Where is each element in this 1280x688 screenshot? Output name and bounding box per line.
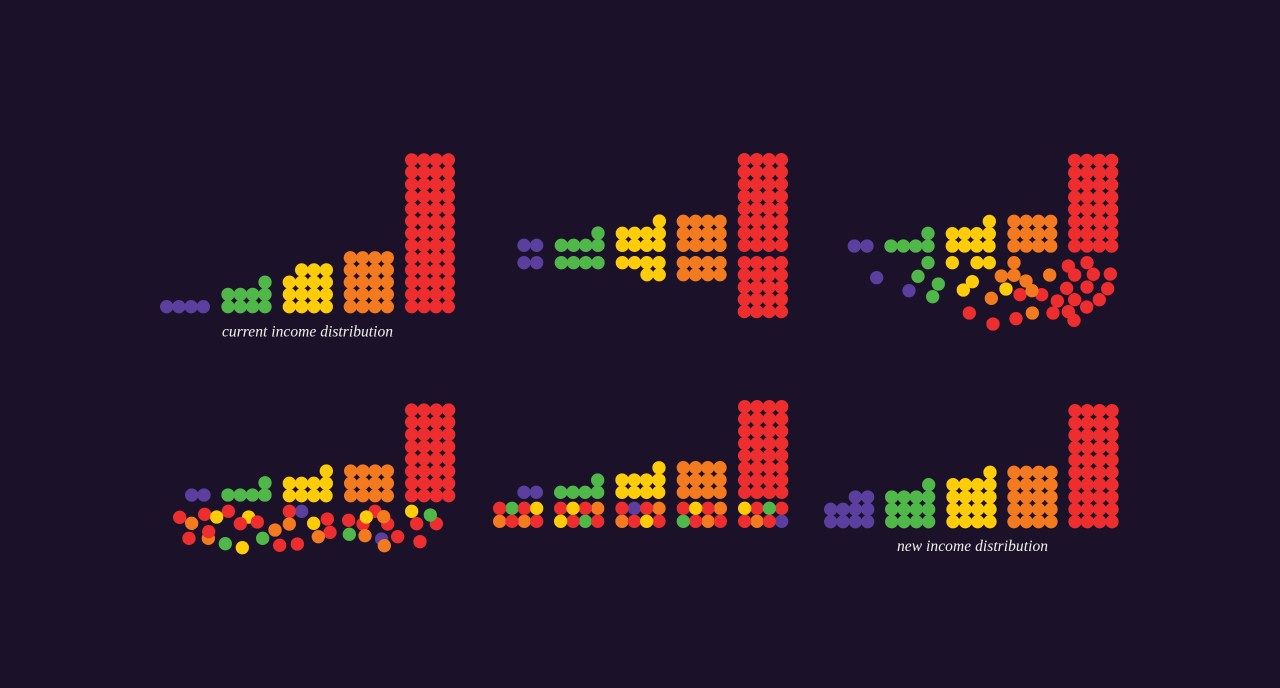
caption: current income distribution: current income distribution	[222, 324, 393, 340]
purple dots split	[517, 239, 543, 269]
scattered orange dots	[185, 510, 391, 552]
purple dots	[848, 239, 916, 297]
panel: new income distribution chart	[831, 410, 1112, 522]
caption: new income distribution: new income distribution	[897, 538, 1048, 555]
yellow bar top	[622, 467, 659, 492]
purple dots	[185, 488, 211, 502]
yellow bar remainder	[289, 471, 326, 496]
orange bar remainder	[351, 471, 388, 496]
green income bar	[892, 484, 929, 522]
under-layer mixed row dots	[493, 502, 788, 528]
green bar remainder	[228, 482, 265, 495]
panel: top bars splitting	[517, 159, 781, 312]
panel: dots redistributed and scattered	[173, 410, 449, 554]
purple bar top	[517, 486, 543, 499]
green dots split	[561, 233, 598, 263]
red bar remainder	[412, 410, 449, 496]
orange falling dots	[985, 256, 1056, 320]
panel: current income distribution chart	[167, 160, 448, 307]
under-layer scattered dots	[202, 505, 388, 546]
green income bar	[228, 282, 265, 307]
orange bar remainder	[1014, 221, 1051, 246]
yellow bar remainder	[952, 221, 989, 246]
scattered green dots	[219, 508, 437, 550]
yellow dots split	[622, 221, 659, 275]
orange income bar	[1014, 472, 1051, 522]
yellow income bar	[289, 270, 326, 307]
red bar top	[745, 406, 782, 492]
scattered yellow dots	[210, 505, 418, 554]
scattered red dots	[173, 505, 443, 552]
orange bar top	[683, 468, 720, 492]
orange dots split	[683, 221, 720, 275]
red income bar	[412, 160, 448, 307]
purple income bar	[167, 287, 204, 327]
top overlapping dots	[999, 282, 1039, 297]
yellow income bar	[953, 472, 990, 522]
red falling dots	[963, 256, 1117, 331]
mixed row yellow and green dots	[530, 502, 776, 528]
purple income bar	[831, 497, 868, 522]
mixed row red dots	[493, 502, 788, 528]
red dots split	[744, 159, 781, 312]
yellow falling dots	[946, 256, 996, 297]
green dots	[884, 227, 945, 303]
orange income bar	[350, 258, 387, 307]
panel: dots sorted into rows	[493, 406, 788, 528]
panel: top dots falling	[848, 159, 1117, 331]
red bar remainder	[1075, 159, 1112, 246]
red income bar	[1075, 410, 1112, 522]
green bar top	[561, 480, 598, 492]
